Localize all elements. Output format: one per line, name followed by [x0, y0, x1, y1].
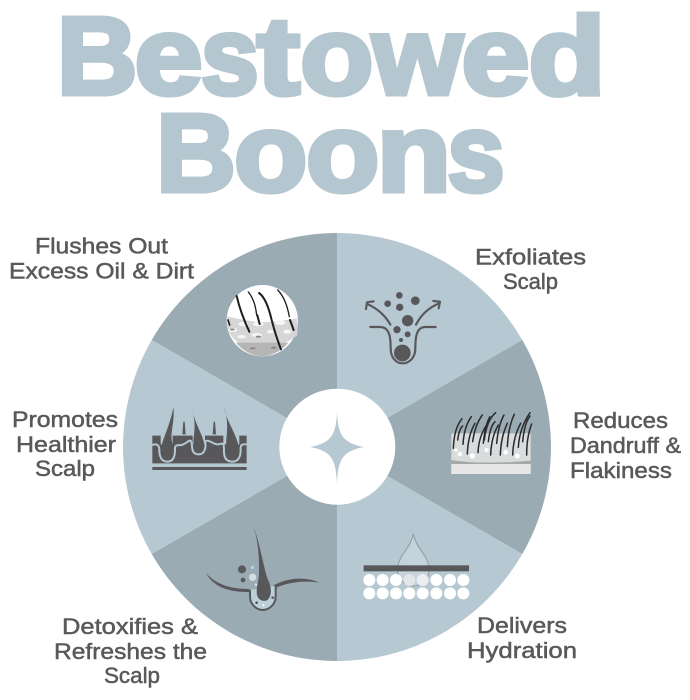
icon: hair follicles in circle: [227, 285, 298, 356]
wheel of six sectors: [123, 233, 551, 661]
icon: healthy scalp cross-section: [152, 407, 247, 470]
title: B: [156, 92, 236, 215]
label: delivers hydration: Hydration: [467, 638, 577, 663]
label: detoxifies and refreshes the scalp: Scalp: [104, 663, 160, 688]
icon: detox hair follicle: [206, 526, 319, 610]
title: o: [234, 92, 307, 215]
label: exfoliates scalp: Scalp: [503, 269, 558, 294]
label: reduces dandruff and flakiness: Reduces: [573, 408, 668, 433]
label: exfoliates scalp: Exfoliates: [475, 244, 586, 270]
icon: hair on skin with flakes: [451, 413, 532, 474]
label: reduces dandruff and flakiness: Flakiness: [570, 458, 672, 483]
label: detoxifies and refreshes the scalp: [54, 614, 207, 688]
icon: water drop over skin cells: [363, 534, 469, 599]
title: o: [306, 92, 379, 215]
label: promotes healthier scalp: Scalp: [35, 456, 95, 481]
label: promotes healthier scalp: [12, 407, 118, 481]
title: s: [447, 92, 505, 215]
label: detoxifies and refreshes the scalp: Detoxifies &: [62, 614, 198, 639]
icon: exfoliation follicle: [366, 292, 440, 363]
label: reduces dandruff and flakiness: Dandruff &: [570, 433, 681, 458]
label: reduces dandruff and flakiness: [570, 408, 681, 483]
label: delivers hydration: [467, 613, 577, 663]
label: promotes healthier scalp: Healthier: [16, 432, 116, 457]
label: promotes healthier scalp: Promotes: [12, 407, 118, 432]
label: flushes out excess oil and dirt: [9, 234, 194, 284]
label: detoxifies and refreshes the scalp: Refreshes the: [54, 639, 207, 664]
label: flushes out excess oil and dirt: Flushes Out: [35, 234, 168, 258]
label: exfoliates scalp: [475, 244, 586, 294]
label: delivers hydration: Delivers: [477, 613, 567, 638]
center circle with star: [279, 389, 395, 505]
title: n: [377, 92, 451, 215]
label: flushes out excess oil and dirt: Excess Oil & Dirt: [9, 258, 194, 284]
title: [57, 0, 606, 215]
